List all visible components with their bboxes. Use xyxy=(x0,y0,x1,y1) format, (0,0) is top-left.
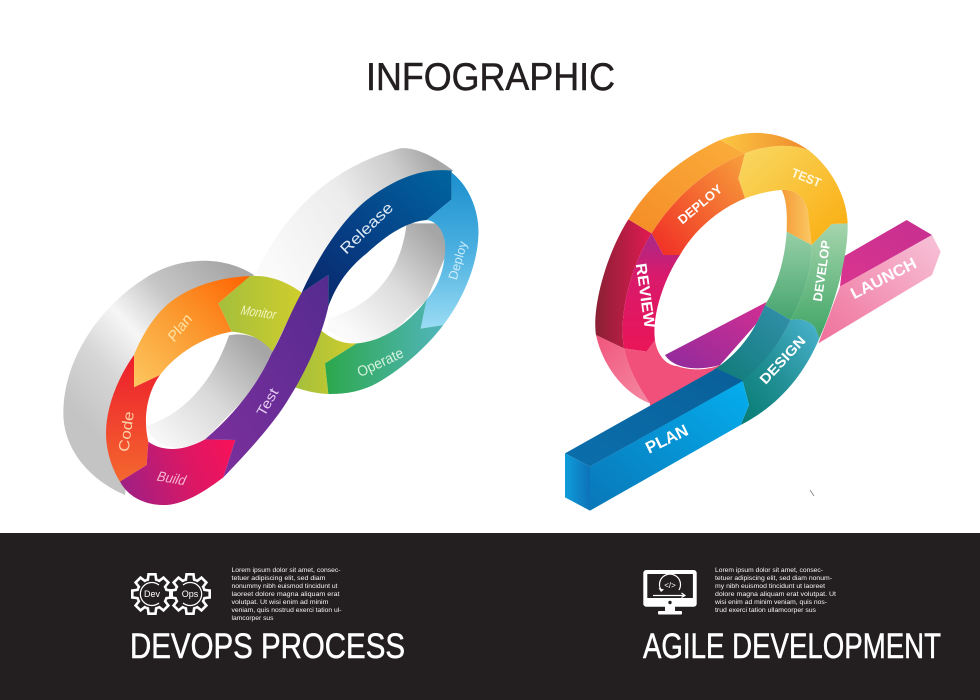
label: PLAN: PLAN xyxy=(642,421,691,457)
label: Build: Build xyxy=(154,469,189,489)
ring side: dark red xyxy=(595,219,652,348)
segment: Build xyxy=(120,439,235,505)
label: DEVELOP: DEVELOP xyxy=(811,239,833,302)
segment: Deploy xyxy=(652,153,745,255)
beam: Plan front face xyxy=(590,381,749,511)
inner wall: orange xyxy=(782,190,812,245)
segment: Pink lower ring xyxy=(624,340,727,410)
ring side: top yellow-orange xyxy=(720,133,808,153)
text block: Agile description xyxy=(714,567,836,614)
ring side: pink xyxy=(596,335,650,403)
label: Release: Release xyxy=(337,199,397,258)
text block: DevOps description: tetuer adipiscing elit, sed diam xyxy=(232,575,326,582)
inner wall: left hole xyxy=(146,334,273,448)
inner wall: green xyxy=(765,232,812,320)
label: REVIEW: REVIEW xyxy=(632,262,658,330)
label: Operate: Operate xyxy=(355,346,406,381)
inner wall: right hole xyxy=(327,223,447,345)
text block: Agile description: tetuer adipiscing elit, sed diam nonum- xyxy=(715,575,832,582)
segment: Design xyxy=(741,319,819,425)
side wall: right loop xyxy=(256,148,453,293)
text block: DevOps description: laoreet dolore magna aliquam erat xyxy=(232,591,340,598)
text block: Agile description: dolore magna aliquam erat volutpat. Ut xyxy=(715,591,836,598)
heading: DEVOPS PROCESS: DEVOPS PROCESS xyxy=(130,627,405,666)
diagram: Agile loop xyxy=(565,133,941,511)
segment: Monitor upper xyxy=(218,276,302,352)
side wall: left loop xyxy=(63,261,254,495)
footer band xyxy=(0,533,980,700)
diagram: DevOps infinity loop xyxy=(63,148,479,505)
label: Test: Test xyxy=(253,385,282,419)
beam: Launch front face xyxy=(818,235,941,343)
segment: Plan xyxy=(134,276,250,387)
label: TEST: TEST xyxy=(789,166,823,190)
beam: Plan top face xyxy=(565,368,743,467)
label: Code: Code xyxy=(116,410,138,453)
label: Monitor: Monitor xyxy=(238,303,279,322)
mark: small stray tick xyxy=(810,490,814,496)
title: INFOGRAPHIC xyxy=(366,56,615,99)
segment: Test xyxy=(205,275,328,477)
text block: DevOps description: nonummy nibh euismod tincidunt ut xyxy=(232,583,338,590)
segment: Deploy xyxy=(421,173,479,329)
label: Deploy: Deploy xyxy=(446,239,470,281)
text block: Agile description: Lorem ipsum dolor sit amet, consec- xyxy=(715,567,823,574)
text block: DevOps description: volutpat. Ut wisi enim ad minim xyxy=(232,599,329,606)
gear: Dev: Dev xyxy=(144,589,160,599)
icon: Dev and Ops gears xyxy=(132,574,210,614)
text block: DevOps description: lamcorper sus xyxy=(232,615,274,622)
ring side: orange xyxy=(628,140,745,233)
label: DESIGN: DESIGN xyxy=(756,332,809,387)
inner wall: purple bottom of the hole xyxy=(665,302,767,368)
label: LAUNCH: LAUNCH xyxy=(848,255,920,303)
label: DEPLOY: DEPLOY xyxy=(675,182,726,227)
gear: Ops: Ops xyxy=(182,589,199,599)
text block: Agile description: wisi enim ad minim veniam, quis nos- xyxy=(714,599,827,606)
segment: Monitor lower xyxy=(295,327,357,394)
text block: DevOps description xyxy=(232,567,342,622)
beam: Launch top face xyxy=(840,220,932,287)
segment: Review xyxy=(623,233,680,352)
icon: monitor with agile loop: </> xyxy=(664,581,676,590)
beam: Plan end face xyxy=(565,453,590,511)
segment: Release xyxy=(302,170,452,307)
text block: Agile description: trud exerci tation ullamcorper sus xyxy=(715,607,817,614)
segment: Test xyxy=(738,146,848,245)
segment: Develop xyxy=(791,223,848,338)
segment: Operate xyxy=(325,299,443,394)
text block: Agile description: my nibh euismod tincidunt ut laoreet xyxy=(715,583,825,590)
icon: monitor with agile loop xyxy=(643,570,697,614)
label: Plan: Plan xyxy=(166,311,195,346)
segment: Code xyxy=(106,355,160,482)
text block: DevOps description: veniam, quis nostrud exerci tation ul- xyxy=(232,607,342,614)
text block: DevOps description: Lorem ipsum dolor sit amet, consec- xyxy=(232,567,340,574)
ring side: Design xyxy=(713,305,791,383)
